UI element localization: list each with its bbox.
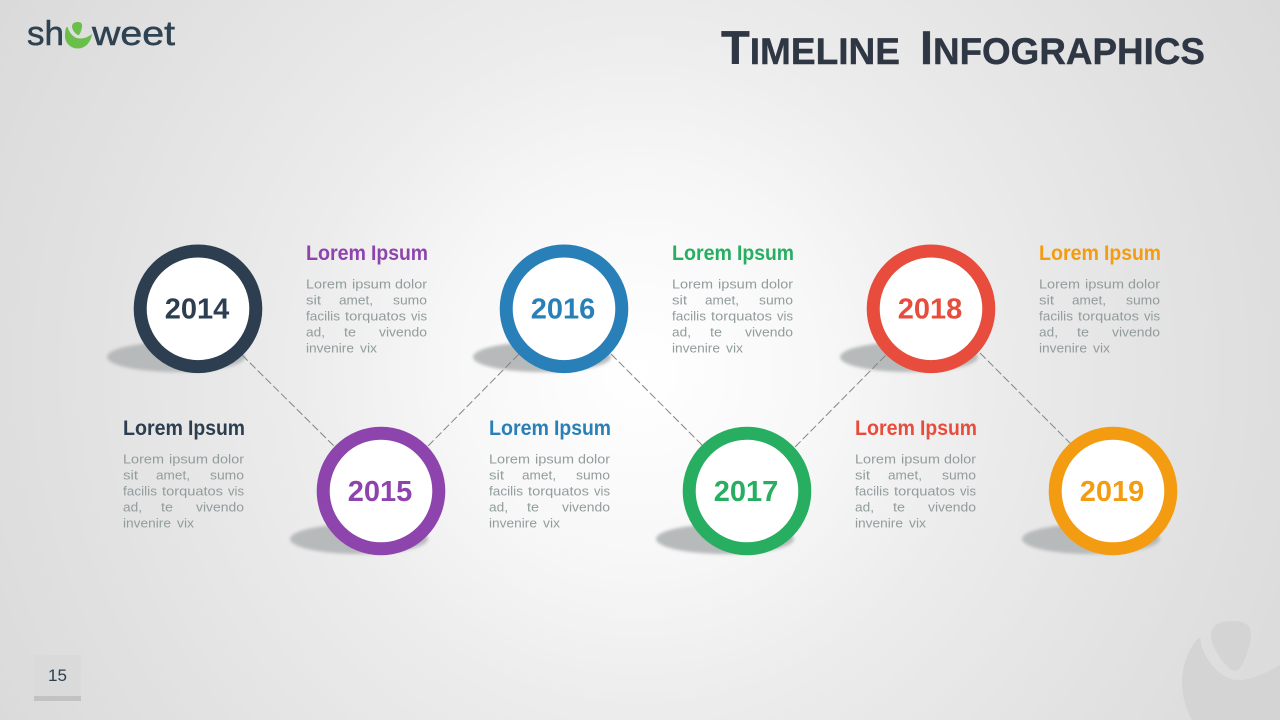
heading: Lorem [123,417,183,440]
page number [34,655,81,701]
body: sit [855,468,870,482]
heading [489,417,611,440]
heading: Lorem [1039,242,1099,265]
body: sit [306,292,321,308]
heading: Ipsum [554,417,611,440]
body: te [161,500,173,514]
body: sumo [210,468,244,482]
body: invenire [489,516,537,530]
body: vix [909,516,927,530]
title: TIMELINE [721,21,900,74]
body: vis [411,308,428,324]
body: Lorem [855,452,896,466]
body: dolor [761,276,794,292]
text block 2015 [306,242,428,356]
body: ipsum [169,452,208,466]
body: facilis [672,308,707,324]
body: facilis [306,308,341,324]
text block 2019 [1039,242,1161,356]
body: te [527,500,539,514]
body: amet, [522,468,556,482]
body: ipsum [352,276,391,292]
logo: showeet: sh [27,15,64,53]
year ring 2014: 2014 [165,294,229,326]
heading: Lorem [306,242,366,265]
page number: 15 [48,666,67,685]
year ring 2019 [1055,433,1171,549]
year ring 2017: 2017 [714,476,778,508]
year ring 2016 [506,251,622,367]
body: dolor [944,452,977,466]
body: vis [1144,308,1161,324]
year ring 2015: 2015 [348,476,412,508]
body: Lorem [306,276,347,292]
watermark logo [1182,621,1280,720]
body: facilis [123,484,158,498]
body: vix [726,340,744,356]
heading [672,242,794,265]
body: invenire [1039,340,1087,356]
heading: Ipsum [737,242,794,265]
body: torquatos [1078,308,1140,324]
body: vivendo [379,324,427,340]
body: dolor [395,276,428,292]
body: dolor [1128,276,1161,292]
body [1039,276,1161,356]
body: sumo [759,292,793,308]
body: torquatos [528,484,590,498]
body: ipsum [535,452,574,466]
body: sit [489,468,504,482]
heading: Lorem [855,417,915,440]
heading [123,417,245,440]
logo: showeet: weet [91,15,176,53]
heading [855,417,977,440]
shadows [107,342,1160,554]
body: vis [594,484,611,498]
body: vix [360,340,378,356]
body: invenire [306,340,354,356]
body: sumo [1126,292,1160,308]
heading: Ipsum [371,242,428,265]
body: ad, [489,500,508,514]
heading: Ipsum [1104,242,1161,265]
body: amet, [705,292,739,308]
body: amet, [888,468,922,482]
body: sumo [393,292,427,308]
body [306,276,428,356]
body: sit [1039,292,1054,308]
body: vivendo [196,500,244,514]
dashed connectors [242,353,1071,447]
body: vivendo [745,324,793,340]
body: vivendo [562,500,610,514]
body: invenire [672,340,720,356]
logo: showeet [27,15,176,53]
body [672,276,794,356]
title [721,21,1205,74]
year ring 2014 [140,251,256,367]
body: dolor [578,452,611,466]
body: torquatos [711,308,773,324]
body: sumo [942,468,976,482]
body: vix [1093,340,1111,356]
text block 2016 [489,417,611,530]
body [855,452,977,530]
body: torquatos [345,308,407,324]
body: invenire [855,516,903,530]
body: sit [672,292,687,308]
heading: Lorem [489,417,549,440]
body [489,452,611,530]
body: Lorem [489,452,530,466]
body: Lorem [672,276,713,292]
body: dolor [212,452,245,466]
heading: Ipsum [188,417,245,440]
year ring 2018: 2018 [898,294,962,326]
text block 2018 [855,417,977,530]
body: vix [177,516,195,530]
body: ad, [123,500,142,514]
year ring 2016: 2016 [531,294,595,326]
body: torquatos [162,484,224,498]
heading: Ipsum [920,417,977,440]
body: vis [228,484,245,498]
body: facilis [1039,308,1074,324]
body: te [344,324,356,340]
text block 2014 [123,417,245,530]
body: ad, [672,324,691,340]
body: vivendo [928,500,976,514]
heading: Lorem [672,242,732,265]
body: ad, [1039,324,1058,340]
body: facilis [855,484,890,498]
body: amet, [339,292,373,308]
body: te [710,324,722,340]
body: vivendo [1112,324,1160,340]
body: sit [123,468,138,482]
body: ad, [855,500,874,514]
title: INFOGRAPHICS [920,21,1205,74]
year ring 2017 [689,433,805,549]
year ring 2018 [873,251,989,367]
year ring 2015 [323,433,439,549]
year ring 2019: 2019 [1080,476,1144,508]
body: amet, [1072,292,1106,308]
body: te [1077,324,1089,340]
icon: logo green mark [65,22,92,48]
body: sumo [576,468,610,482]
text block 2017 [672,242,794,356]
body: ipsum [1085,276,1124,292]
heading [1039,242,1161,265]
body: torquatos [894,484,956,498]
body: ipsum [718,276,757,292]
body: Lorem [123,452,164,466]
body: Lorem [1039,276,1080,292]
body [123,452,245,530]
body: te [893,500,905,514]
body: facilis [489,484,524,498]
body: amet, [156,468,190,482]
body: vis [960,484,977,498]
body: invenire [123,516,171,530]
heading [306,242,428,265]
body: ad, [306,324,325,340]
body: vis [777,308,794,324]
body: ipsum [901,452,940,466]
body: vix [543,516,561,530]
